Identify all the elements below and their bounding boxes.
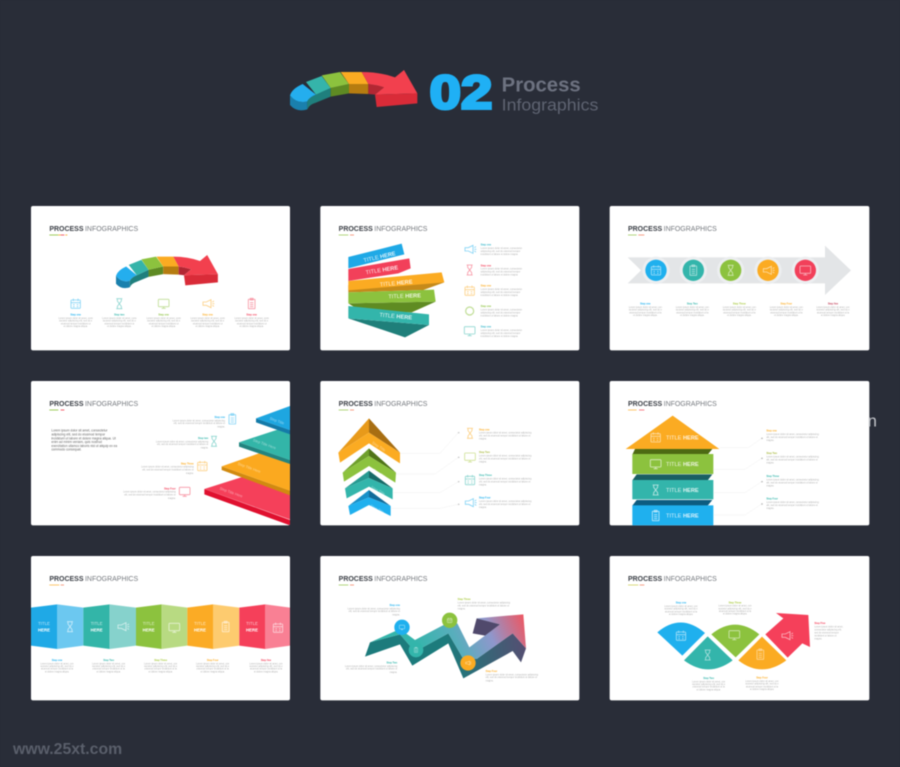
step text four: elit, sed do eiusmod tempor incididunt ut labore et xyxy=(766,504,818,507)
step text three: Lorem ipsum dolor sit amet, cons xyxy=(147,317,182,320)
panel: ribbon slide xyxy=(320,206,579,350)
folded strip: TITLE xyxy=(194,621,206,626)
step text five: sectetur adipiscing elit, sed do e xyxy=(235,320,269,323)
step text two: sectetur adipiscing elit, sed do e xyxy=(692,683,726,686)
step text one: Lorem ipsum dolor sit amet, consectetur xyxy=(481,247,522,250)
layer stack: Step Title Here xyxy=(252,438,276,450)
step text three: elit, sed do eiusmod tempor incididunt ut labore et xyxy=(142,468,194,471)
step text one: magna. xyxy=(479,439,487,441)
step text three: magna. xyxy=(458,608,466,610)
chevron stack: Step Title xyxy=(370,485,386,496)
step text three: adipiscing elit, sed do eiusmod tempor xyxy=(481,291,520,294)
step text two: eiusmod tempor incididunt ut la xyxy=(676,311,709,314)
step text four: magna. xyxy=(486,681,494,683)
step text one: et dolore magna aliqua. xyxy=(63,325,88,328)
step text three: Lorem ipsum dolor sit amet, con xyxy=(144,662,178,665)
step text five: incididunt ut labore et dolore magna xyxy=(481,335,518,338)
step text five: Lorem ipsum dolor sit amet, con xyxy=(816,306,850,309)
step text five: Step five xyxy=(261,659,272,662)
panel: house stack slide xyxy=(610,381,877,526)
step text five: et dolore magna aliqua. xyxy=(239,325,264,328)
ribbon stack xyxy=(348,244,444,337)
step text five: sectetur adipiscing elit, sed do e xyxy=(816,309,850,312)
step text four: Lorem ipsum dolor sit amet, consectetur xyxy=(481,308,522,311)
step text four: Step Four xyxy=(479,497,491,500)
step text one: magna. xyxy=(217,427,225,429)
step text two: Step one xyxy=(481,264,492,267)
intro paragraph: adipiscing elit, sed do eiusmod tempor xyxy=(51,432,105,436)
connector lines xyxy=(713,437,763,515)
step text five: magna. xyxy=(814,638,822,640)
step text two: Step Two xyxy=(687,303,698,306)
step text two: elit, sed do eiusmod tempor incididunt ut labore et xyxy=(479,457,531,460)
icon column xyxy=(464,245,476,336)
step text three: Lorem ipsum dolor sit amet, consectetur xyxy=(481,288,522,291)
step text one: elit, sed do eiusmod tempor incididunt ut labore et xyxy=(766,436,818,439)
intro paragraph: enim ad minim veniam, quis nostrud xyxy=(51,440,102,444)
step text one: eiusmod tempor incididunt ut la xyxy=(41,668,74,671)
step text one: Lorem ipsum dolor sit amet, consectetur adipiscing xyxy=(348,607,401,610)
layer stack xyxy=(204,406,293,525)
step text three: Step Three xyxy=(766,475,780,478)
step text three: eiusmod tempor incididunt ut la xyxy=(723,311,756,314)
step text three: magna. xyxy=(479,484,487,486)
ribbon stack: TITLE HERE xyxy=(363,251,397,264)
step text four: et dolore magna aliqua. xyxy=(195,325,220,328)
step text two: Lorem ipsum dolor sit amet, con xyxy=(692,680,726,683)
step text one: eiusmod tempor incididunt ut la xyxy=(665,610,698,613)
step text one: elit, sed do eiusmod tempor incididunt ut labore et xyxy=(479,435,531,438)
slide title: PROCESS INFOGRAPHICS xyxy=(628,576,717,583)
step text four: Lorem ipsum dolor sit amet, consectetur adipiscing xyxy=(766,501,819,504)
step text three: eiusmod tempor incididunt ut la xyxy=(719,610,752,613)
step text two: Step Two xyxy=(103,659,115,662)
step text three: Step one xyxy=(481,285,492,288)
step text one: Lorem ipsum dolor sit amet, con xyxy=(40,662,74,665)
ribbon stack: TITLE HERE xyxy=(365,265,399,276)
intro paragraph: commodo consequat. xyxy=(51,448,82,452)
step text five: eiusmod tempor incididunt ut la xyxy=(817,311,850,314)
intro paragraph: exercitation ullamco laboris nisi ut aliquip ex ea xyxy=(51,444,117,448)
step text three: Lorem ipsum dolor sit amet, consectetur adipiscing xyxy=(479,477,532,480)
step text four: elit, sed do eiusmod tempor incididunt ut labore et xyxy=(486,676,537,679)
step text four: eiusmod tempor incididunt ut la xyxy=(197,668,229,671)
zigzag arrow xyxy=(365,613,526,678)
step text one: sectetur adipiscing elit, sed do e xyxy=(664,608,698,611)
house stack: TITLE HERE xyxy=(666,462,699,468)
slide title: PROCESS INFOGRAPHICS xyxy=(628,401,717,408)
slide title: PROCESS INFOGRAPHICS xyxy=(339,401,428,408)
step text three: Step Three xyxy=(181,462,194,465)
step text five: incididunt ut labore et xyxy=(814,634,837,637)
step text two: Step Two xyxy=(479,451,490,454)
step text two: et dolore magna aliqua. xyxy=(96,670,121,673)
step text three: Step Three xyxy=(479,474,492,477)
folded strip: TITLE xyxy=(91,621,103,626)
step text two: Lorem ipsum dolor sit amet, consectetur adipiscing xyxy=(345,665,398,668)
step text three: Step Three xyxy=(154,659,168,662)
icon row xyxy=(71,298,255,309)
step text five: Lorem ipsum dolor sit amet, con xyxy=(249,662,283,665)
step text one: Lorem ipsum dolor sit amet, consectetur adipiscing xyxy=(173,419,226,422)
step text two: elit, sed do eiusmod tempor incididunt ut labore et xyxy=(766,458,818,461)
step text four: Step one xyxy=(202,313,214,316)
step text two: Step Two xyxy=(766,452,778,455)
step text four: elit, sed do eiusmod tempor incididunt ut labore et xyxy=(124,493,176,496)
step text four: Lorem ipsum dolor sit amet, con xyxy=(196,662,230,665)
folded strip: HERE xyxy=(194,627,206,632)
step text two: eiusmod tempor incididunt ut la xyxy=(693,686,725,689)
step text one: eiusmod tempor incididunt ut xyxy=(61,322,91,325)
step text one: Step one xyxy=(214,416,226,419)
chevron stack xyxy=(338,418,400,516)
step text four: Step Four xyxy=(756,677,768,680)
step text five: Lorem ipsum dolor sit amet, consectetur xyxy=(481,329,522,332)
step text four: Lorem ipsum dolor sit amet, consectetur adipiscing xyxy=(486,673,539,676)
step text four: magna. xyxy=(168,498,176,500)
panel: chevron slide xyxy=(320,381,579,525)
step text three: sectetur adipiscing elit, sed do e xyxy=(723,309,757,312)
step text four: Lorem ipsum dolor sit amet, consectetur adipiscing xyxy=(123,491,176,494)
panel: straight arrow slide xyxy=(610,206,869,350)
step text five: Step one xyxy=(481,326,492,329)
step text four: Lorem ipsum dolor sit amet, con xyxy=(745,680,779,683)
step text one: Lorem ipsum dolor sit amet, consectetur adipiscing xyxy=(766,433,819,436)
folded strip xyxy=(31,604,290,649)
watermark: www.25xt.com xyxy=(12,741,122,758)
step text one: et dolore magna aliqua. xyxy=(669,613,694,616)
step text three: eiusmod tempor incididunt ut xyxy=(149,322,179,325)
step text three: Lorem ipsum dolor sit amet, consectetur adipiscing xyxy=(766,478,819,481)
step text three: Step one xyxy=(158,313,170,316)
intro paragraph: incididunt ut labore et dolore magna aliqua. Ut xyxy=(51,436,116,440)
step text three: Step Three xyxy=(729,601,742,604)
step text two: sectetur adipiscing elit, sed do e xyxy=(103,320,137,323)
step text one: incididunt ut labore et dolore magna xyxy=(481,253,518,256)
step text four: magna. xyxy=(479,507,487,509)
step text five: et dolore magna aliqua. xyxy=(821,314,846,317)
step text two: eiusmod tempor incididunt ut la xyxy=(93,668,125,671)
house stack: TITLE HERE xyxy=(666,435,699,441)
step text one: Step one xyxy=(389,604,401,607)
panel: wave arrow slide xyxy=(610,556,869,700)
folded strip: HERE xyxy=(143,627,155,632)
step text three: et dolore magna aliqua. xyxy=(723,613,748,616)
step text one: Lorem ipsum dolor sit amet, cons xyxy=(59,317,94,320)
chevron stack: Step Title xyxy=(371,441,386,452)
step text four: Step Four xyxy=(164,487,176,490)
step text one: magna. xyxy=(766,440,774,442)
step text two: Lorem ipsum dolor sit amet, con xyxy=(92,662,126,665)
step text two: Lorem ipsum dolor sit amet, con xyxy=(676,306,710,309)
step text five: adipiscing elit, sed do eiusmod tempor xyxy=(481,332,520,335)
step text three: et dolore magna aliqua. xyxy=(151,325,176,328)
house stack: TITLE HERE xyxy=(666,488,699,494)
step text three: et dolore magna aliqua. xyxy=(148,670,173,673)
panel: folded strip slide xyxy=(31,556,290,700)
step text four: magna. xyxy=(766,508,774,510)
step text two: Step Two xyxy=(386,662,398,665)
step text two: Lorem ipsum dolor sit amet, consectetur adipiscing xyxy=(156,440,209,443)
step text two: magna. xyxy=(201,448,209,450)
step text five: Lorem ipsum dolor sit amet, cons xyxy=(235,317,270,320)
curved arrow xyxy=(116,255,218,288)
icon: 3D curved arrow xyxy=(290,70,417,110)
section number: 02 xyxy=(430,67,492,120)
step text one: Step one xyxy=(70,313,82,316)
header xyxy=(290,67,598,120)
step text four: sectetur adipiscing elit, sed do e xyxy=(196,665,230,668)
wave arrow xyxy=(657,613,810,669)
step text two: Lorem ipsum dolor sit amet, consectetur adipiscing xyxy=(766,455,819,458)
step text four: Lorem ipsum dolor sit amet, con xyxy=(770,306,804,309)
panel: zigzag arrow slide xyxy=(320,556,579,700)
step text one: eiusmod tempor incididunt ut la xyxy=(629,311,662,314)
chevron stack: Step Title xyxy=(370,504,385,515)
step text one: sectetur adipiscing elit, sed do e xyxy=(59,320,93,323)
slide title: PROCESS INFOGRAPHICS xyxy=(628,226,717,233)
folded strip: TITLE xyxy=(246,621,258,626)
step text four: et dolore magna aliqua. xyxy=(750,688,775,691)
step text one: Lorem ipsum dolor sit amet, con xyxy=(664,605,698,608)
step text one: et dolore magna aliqua. xyxy=(633,314,658,317)
step text three: elit, sed do eiusmod tempor incididunt ut labore et xyxy=(458,604,509,607)
step text two: et dolore magna aliqua. xyxy=(107,325,132,328)
step text one: elit, sed do eiusmod tempor incididunt ut labore et xyxy=(174,422,225,425)
step text four: sectetur adipiscing elit, sed do e xyxy=(191,320,225,323)
step text five: sed do eiusmod tempor xyxy=(814,631,839,634)
slide title: PROCESS INFOGRAPHICS xyxy=(49,576,138,583)
step text two: sectetur adipiscing elit, sed do e xyxy=(92,665,126,668)
step text four: sectetur adipiscing elit, sed do e xyxy=(770,309,804,312)
step text two: Lorem ipsum dolor sit amet, consectetur adipiscing xyxy=(479,454,532,457)
folded strip: TITLE xyxy=(143,621,155,626)
step text three: Lorem ipsum dolor sit amet, con xyxy=(723,306,757,309)
icons xyxy=(465,428,477,507)
step text one: sectetur adipiscing elit, sed do e xyxy=(40,665,74,668)
step text five: Step one xyxy=(246,313,258,316)
slide title: PROCESS INFOGRAPHICS xyxy=(339,576,428,583)
step text two: eiusmod tempor incididunt ut xyxy=(104,322,135,325)
step text four: Lorem ipsum dolor sit amet, cons xyxy=(191,317,226,320)
layer stack: Step Title xyxy=(269,417,285,425)
folded strip: HERE xyxy=(91,627,103,632)
house stack: TITLE HERE xyxy=(666,514,699,520)
step text five: Lorem ipsum dolor sit amet, xyxy=(814,625,843,628)
step text four: Step Four xyxy=(781,303,792,306)
chevron stack: Step Title xyxy=(372,468,387,480)
panel: stacked layers slide xyxy=(31,381,293,525)
layer stack: Step Title Here xyxy=(219,487,243,499)
step text three: Lorem ipsum dolor sit amet, consectetur adipiscing xyxy=(141,466,194,469)
step text two: Lorem ipsum dolor sit amet, consectetur xyxy=(481,268,522,271)
step circles xyxy=(642,257,819,284)
folded strip: HERE xyxy=(38,627,50,632)
folded strip: HERE xyxy=(246,627,258,632)
heading: Process: Process xyxy=(502,74,581,97)
panel: curved arrow slide xyxy=(31,206,290,350)
step text three: Lorem ipsum dolor sit amet, con xyxy=(718,605,752,608)
step text four: eiusmod tempor incididunt ut xyxy=(193,322,223,325)
step text three: sectetur adipiscing elit, sed do e xyxy=(144,665,178,668)
step text two: magna. xyxy=(390,672,398,674)
step text two: Step Two xyxy=(703,677,715,680)
step text four: Step one xyxy=(481,305,492,308)
step text four: Lorem ipsum dolor sit amet, consectetur adipiscing xyxy=(479,500,532,503)
ribbon stack: TITLE HERE xyxy=(380,279,413,288)
step text one: Step one xyxy=(481,244,492,247)
step text two: elit, sed do eiusmod tempor incididunt ut labore et xyxy=(157,443,209,446)
layer stack: Step Title Here xyxy=(237,462,261,474)
step text four: et dolore magna aliqua. xyxy=(200,670,225,673)
step text four: adipiscing elit, sed do eiusmod tempor xyxy=(481,311,520,314)
step text two: adipiscing elit, sed do eiusmod tempor xyxy=(481,271,520,274)
slide title: PROCESS INFOGRAPHICS xyxy=(49,401,138,408)
step text two: Step two xyxy=(114,313,125,316)
step text one: Step one xyxy=(640,303,651,306)
step text two: Lorem ipsum dolor sit amet, cons xyxy=(102,317,137,320)
grey arrow xyxy=(628,246,851,295)
step text three: incididunt ut labore et dolore magna xyxy=(481,294,518,297)
step text two: sectetur adipiscing elit, sed do e xyxy=(676,309,710,312)
step text one: et dolore magna aliqua. xyxy=(45,670,70,673)
step text five: sectetur adipiscing elit, sed do e xyxy=(249,665,283,668)
step text four: incididunt ut labore et dolore magna xyxy=(481,314,518,317)
icons xyxy=(179,414,236,496)
step text four: Step Four xyxy=(486,670,497,673)
step text four: sectetur adipiscing elit, sed do e xyxy=(745,683,779,686)
house stack xyxy=(626,416,719,526)
step text four: elit, sed do eiusmod tempor incididunt ut labore et xyxy=(479,503,531,506)
step text four: Step Four xyxy=(766,498,778,501)
step text one: Step one xyxy=(52,659,63,662)
step text three: Step Three xyxy=(733,303,746,306)
step text four: eiusmod tempor incididunt ut la xyxy=(770,311,803,314)
step text three: Lorem ipsum dolor sit amet, consectetur adipiscing xyxy=(458,602,511,605)
step text five: Step five xyxy=(828,303,839,306)
step text three: elit, sed do eiusmod tempor incididunt ut labore et xyxy=(766,481,818,484)
step text two: magna. xyxy=(766,462,774,464)
step text one: elit, sed do eiusmod tempor incididunt ut labore et xyxy=(349,610,400,613)
step text five: consectetur adipiscing elit, xyxy=(814,628,842,631)
step text two: et dolore magna aliqua. xyxy=(696,688,721,691)
step text two: incididunt ut labore et dolore magna xyxy=(481,274,518,277)
step text one: Lorem ipsum dolor sit amet, con xyxy=(629,306,663,309)
step text three: magna. xyxy=(186,473,194,475)
step text one: sectetur adipiscing elit, sed do e xyxy=(629,309,663,312)
ribbon stack: TITLE HERE xyxy=(379,313,412,322)
step text one: Step one xyxy=(766,430,777,433)
step text one: Step one xyxy=(676,602,687,605)
subheading: Infographics: Infographics xyxy=(502,96,598,115)
step text three: elit, sed do eiusmod tempor incididunt ut labore et xyxy=(479,480,531,483)
stray letter over background: n xyxy=(868,412,877,431)
step text two: Step two xyxy=(198,437,209,440)
step text five: Step Five xyxy=(814,622,826,625)
step text three: eiusmod tempor incididunt ut la xyxy=(145,668,177,671)
step text two: et dolore magna aliqua. xyxy=(680,314,705,317)
step text three: et dolore magna aliqua. xyxy=(727,314,752,317)
step text two: elit, sed do eiusmod tempor incididunt ut labore et xyxy=(346,668,398,671)
step text one: Step one xyxy=(479,428,490,431)
step text four: et dolore magna aliqua. xyxy=(774,314,799,317)
step text five: eiusmod tempor incididunt ut xyxy=(237,322,267,325)
step text four: eiusmod tempor incididunt ut la xyxy=(746,685,779,688)
step text five: et dolore magna aliqua. xyxy=(254,670,279,673)
step text three: sectetur adipiscing elit, sed do e xyxy=(718,607,752,610)
slide title: PROCESS INFOGRAPHICS xyxy=(339,226,428,233)
step text one: magna. xyxy=(392,614,400,616)
step text one: adipiscing elit, sed do eiusmod tempor xyxy=(481,250,520,253)
slide title: PROCESS INFOGRAPHICS xyxy=(49,226,138,233)
intro paragraph: Lorem ipsum dolor sit amet, consectetur xyxy=(51,429,107,433)
step text four: Step Four xyxy=(207,659,218,662)
step text five: eiusmod tempor incididunt ut la xyxy=(250,668,283,671)
step text three: sectetur adipiscing elit, sed do e xyxy=(147,320,181,323)
step text three: Step Three xyxy=(458,598,471,601)
step text two: magna. xyxy=(479,461,487,463)
step text three: magna. xyxy=(766,485,774,487)
connector lines xyxy=(391,432,459,508)
ribbon stack: TITLE HERE xyxy=(388,293,421,300)
step text one: Lorem ipsum dolor sit amet, consectetur adipiscing xyxy=(479,432,532,435)
folded strip: TITLE xyxy=(38,621,50,626)
